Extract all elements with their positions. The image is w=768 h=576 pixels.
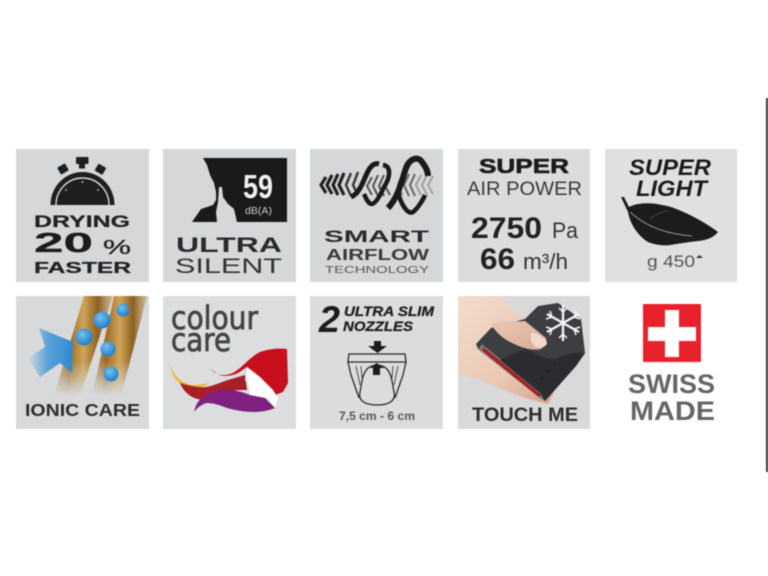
text: made: MADE <box>630 396 715 426</box>
panel: super light <box>605 149 737 282</box>
panel: touch me <box>458 296 590 429</box>
icon: swiss flag <box>643 304 701 362</box>
icon: snowflake <box>546 305 580 341</box>
text: percent: % <box>103 237 131 259</box>
text: ionic care: IONIC CARE <box>25 400 140 420</box>
panel: ionic care <box>16 296 149 429</box>
text: touch me: TOUCH ME <box>472 405 578 426</box>
text: drying: DRYING <box>34 213 130 231</box>
text: silent: SILENT <box>175 255 282 278</box>
text: 2750: 2750 <box>471 212 542 245</box>
text: technology: TECHNOLOGY <box>325 265 429 276</box>
text: nozzle sizes: 7,5 cm - 6 cm <box>339 409 415 423</box>
text: dB(A): dB(A) <box>245 205 272 217</box>
text: air power: AIR POWER <box>467 179 582 200</box>
text: 59: 59 <box>243 168 273 205</box>
icon: small triangle <box>696 255 703 258</box>
panel: colour care <box>163 296 296 429</box>
text: Pa: Pa <box>552 218 579 243</box>
icon: hand holding nozzle <box>458 296 585 404</box>
icon: inner arrow <box>370 363 384 375</box>
panel: smart airflow technology <box>310 149 443 282</box>
text: 20: 20 <box>34 227 93 258</box>
icon: stopwatch <box>50 157 114 205</box>
text: ultra slim: ULTRA SLIM <box>344 303 434 319</box>
text: 66: 66 <box>480 243 515 276</box>
icon: airflow chevrons and ribbons <box>321 159 433 213</box>
panel: ultra silent <box>163 149 296 282</box>
text: care: care <box>171 321 231 359</box>
panel: swiss made <box>628 304 715 426</box>
icon: silhouette with finger on lips <box>192 158 287 222</box>
icon: feather <box>621 197 718 245</box>
icon: ion droplets <box>76 304 130 382</box>
text: nozzles: NOZZLES <box>343 318 414 334</box>
text: m3/h: m³/h <box>523 249 568 274</box>
text: 2: 2 <box>318 299 340 340</box>
text: super: SUPER <box>479 155 569 178</box>
panel: ultra slim nozzles <box>310 296 443 429</box>
icon: down arrow <box>368 341 387 353</box>
icon: hair strands <box>54 296 147 396</box>
text: swiss: SWISS <box>628 369 715 399</box>
text: colour: colour <box>171 299 259 337</box>
text: smart: SMART <box>324 227 430 246</box>
text: weight: g 450 <box>647 252 695 271</box>
panel: super air power <box>458 149 590 282</box>
panel: drying 20% faster <box>16 149 149 282</box>
icon: woman with coloured hair <box>169 349 288 412</box>
text: super: SUPER <box>629 155 711 180</box>
icon: blue arrow <box>28 328 73 377</box>
text: light: LIGHT <box>636 176 709 201</box>
text: airflow: AIRFLOW <box>326 247 430 264</box>
text: faster: FASTER <box>34 260 132 277</box>
icon: nozzle outline <box>348 354 406 405</box>
text: ultra: ULTRA <box>176 234 282 257</box>
